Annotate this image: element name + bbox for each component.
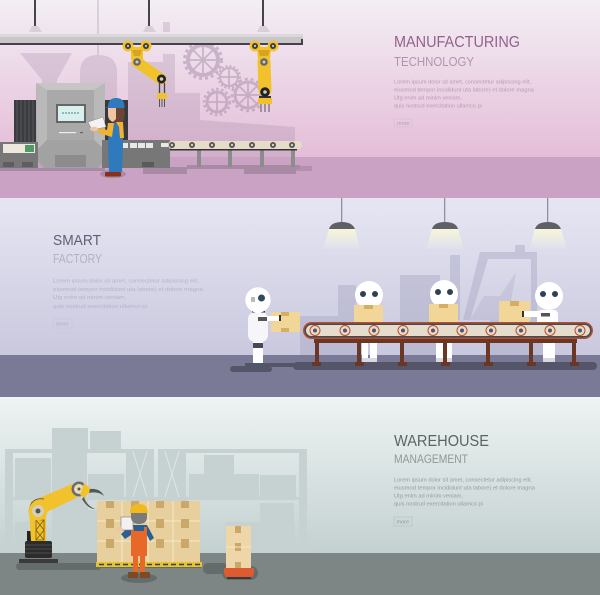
conveyor (168, 141, 302, 167)
button: more (394, 517, 412, 526)
machine body (36, 83, 105, 168)
floor shadows (230, 362, 597, 372)
body text: smart factory: eiusmod tempor incididunt uta labore) et dolore magna (53, 287, 204, 293)
conveyor belt (303, 322, 593, 366)
panel: manufacturing technology (0, 0, 600, 198)
body text: manufacturing: eiusmod tempor incididunt uta labore) et dolore magna (394, 88, 535, 94)
body text: manufacturing: Lorem ipsum dolor sit amet, consectetur adipiscing elit, (394, 80, 531, 86)
button: more: more (56, 322, 69, 328)
robot 1 (245, 287, 272, 367)
worker with hard hat (118, 504, 154, 578)
cardboard boxes on conveyor (354, 301, 558, 327)
body text: smart factory (53, 278, 204, 310)
background factory silhouette (20, 0, 295, 157)
body text: manufacturing: Utg enim ad minim veniam, (394, 96, 462, 102)
body text: warehouse: eiusmod tempor incididunt uta labore) et dolore magna (394, 486, 536, 492)
robot arm right (250, 40, 278, 112)
right control box (102, 140, 170, 168)
heading: manufacturing technology: MANUFACTURING (394, 34, 520, 51)
body text: warehouse: Lorem ipsum dolor sit amet, consectetur adipiscing elit, (394, 478, 532, 484)
left control box (0, 142, 38, 168)
body text: warehouse (394, 478, 536, 508)
box cart (224, 526, 254, 579)
robot arm left (122, 40, 167, 107)
body text: smart factory: Lorem ipsum dolor sit amet, connectetur adipiscing elit, (53, 278, 199, 284)
hanging lamps (323, 198, 567, 249)
ceiling rods (34, 0, 264, 26)
pallet of boxes (96, 501, 202, 567)
heading: smart factory: FACTORY (53, 251, 102, 266)
machine radiator (14, 100, 128, 144)
heading: warehouse management: WAREHOUSE (394, 433, 489, 450)
box held by robot 1 (267, 312, 300, 332)
heading: smart factory: SMART (53, 232, 101, 249)
body text: warehouse: quis nostrud exercitation ullamco pi (394, 502, 483, 508)
button: more: more (397, 121, 410, 127)
heading: smart factory (53, 232, 102, 266)
heading: warehouse management (394, 433, 489, 466)
body text: smart factory: quis nostrud exercitation ullamco pi (53, 304, 147, 310)
background gears (184, 42, 264, 115)
button: more (53, 319, 72, 328)
body text: manufacturing: quis nostrud exercitation ullamco pi (394, 104, 482, 110)
worker with tablet (88, 98, 125, 176)
body text: smart factory: Utg enim ad minim veniam, (53, 295, 126, 301)
background forklift silhouette (300, 245, 545, 355)
body text: warehouse: Utg enim ad minim veniam, (394, 494, 463, 500)
button: more (394, 119, 412, 127)
yellow robot arm (19, 482, 104, 563)
body text: manufacturing (394, 80, 535, 110)
panel: warehouse management (0, 397, 600, 595)
background warehouse shelves (5, 428, 307, 553)
floor shadows (0, 165, 312, 178)
robots behind conveyor (355, 280, 563, 362)
heading: manufacturing technology (394, 34, 520, 69)
overhead rail (0, 34, 303, 45)
heading: warehouse management: MANAGEMENT (394, 452, 469, 466)
floor shadows (16, 563, 258, 583)
button: more: more (396, 520, 409, 526)
panel: smart factory (0, 198, 600, 397)
rod mounts (29, 26, 270, 32)
heading: manufacturing technology: TECHNOLOGY (394, 54, 474, 69)
